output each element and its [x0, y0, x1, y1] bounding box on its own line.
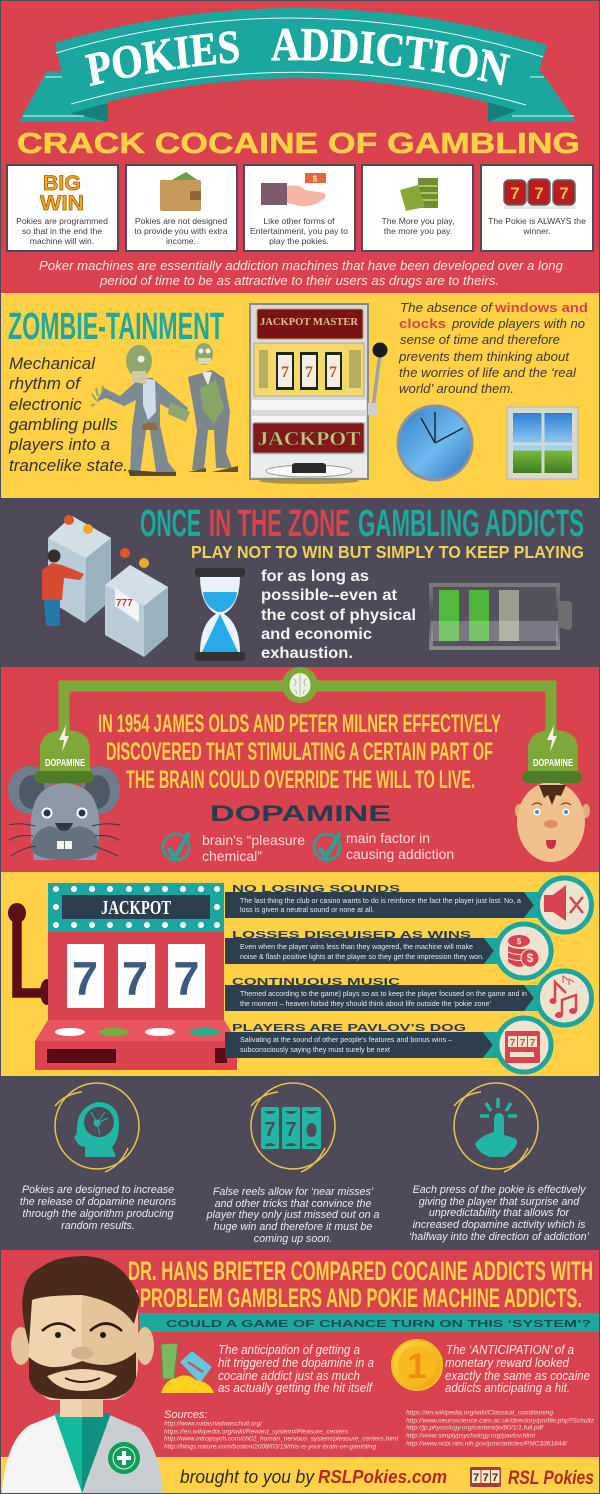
check 1	[163, 832, 305, 864]
text: exhaustion: for as long as	[261, 568, 369, 585]
card 5: 777 reels: The Pokie is ALWAYS the	[488, 216, 586, 226]
helmet left: DOPAMINE	[45, 757, 85, 769]
caption 2: and other tricks that convince the	[215, 1198, 371, 1210]
doctor coat	[2, 1413, 163, 1493]
lever	[17, 915, 48, 993]
doctor brows and eyes	[42, 1324, 122, 1338]
text: windows and clocks: windows and	[494, 300, 588, 315]
headline: olds and milner	[98, 710, 501, 794]
text: windows and clocks: provide players with no	[451, 316, 585, 331]
ring 2	[251, 1083, 335, 1172]
caption 2: player they only just missed out on a	[206, 1209, 379, 1221]
text: windows and clocks: clocks	[399, 316, 446, 331]
icon: slot machine: 7	[520, 1038, 526, 1049]
background: red header panel	[0, 0, 600, 293]
illustration: isometric machines	[42, 515, 168, 657]
caption 1: through the algorithm producing	[23, 1208, 174, 1220]
card 5: 777 reels: 7	[534, 184, 544, 203]
row 3: continuous music: CONTINUOUS MUSIC	[232, 976, 401, 988]
row 4: players are pavlov's dog: subconsciously saying they must surely be next	[240, 1047, 390, 1054]
card 3: hand and money: play the pokies.	[269, 236, 329, 246]
row 2: losses disguised as wins: Even when the player wins less than they wagered, the machine will make	[240, 944, 473, 951]
doctor beard	[29, 1352, 136, 1399]
row 1: no losing sounds: loss is given a neutral sound or none at all.	[240, 907, 374, 914]
caption 3: increased dopamine activity which is	[413, 1219, 586, 1231]
sources left: http://www.natashadowschull.org/	[164, 1420, 263, 1428]
card 1: big win: so that in the end the	[22, 226, 102, 236]
icon: brain	[282, 667, 318, 703]
card 2: wallet: income.	[166, 236, 196, 246]
text: windows and clocks: world’ around them.	[399, 381, 514, 396]
text: mechanical rhythm: rhythm of	[9, 374, 82, 393]
panel: dopamine mechanisms	[0, 1076, 600, 1250]
row 4: players are pavlov's dog: Salivating at the sound of other people’s features and bonus wins –	[240, 1037, 452, 1044]
caption 2: False reels allow for ‘near misses’	[213, 1186, 374, 1198]
row 3: continuous music	[225, 971, 592, 1025]
ribbon right tail	[488, 70, 576, 122]
card 5: 777 reels	[481, 165, 593, 251]
icon: slot machine	[250, 304, 388, 484]
headline: brieter	[128, 1256, 593, 1313]
icon: slot machine: 7	[530, 1038, 536, 1049]
icon: window	[507, 407, 578, 479]
ribbon left tail	[19, 71, 108, 122]
icon: right zombie	[188, 343, 238, 472]
reels	[254, 343, 364, 396]
row 1: no losing sounds: The last thing the club or casino wants to do is reinforce the fact the player just lost. No, a	[240, 898, 521, 905]
column 3	[409, 1083, 590, 1243]
caption 3: unpredictability that allows for	[429, 1207, 570, 1219]
footer credit	[180, 1466, 447, 1487]
doctor ears	[11, 1327, 154, 1365]
sources left: Sources:	[164, 1409, 207, 1421]
check 2	[314, 830, 454, 862]
icon: reels: 7	[264, 1119, 276, 1141]
caption 3: Each press of the pokie is effectively	[413, 1184, 586, 1196]
sources right: http://www.ncbi.nlm.nih.gov/pmc/articles/PMC3361844/	[406, 1440, 568, 1448]
subheading bar	[140, 1313, 600, 1332]
text: windows and clocks: the worries of life and the ‘real	[399, 365, 577, 380]
doctor scrubs	[54, 1395, 111, 1493]
sources right: http://www.simplypsychology.org/pavlov.html	[406, 1432, 536, 1440]
caption 1: Pokies are designed to increase	[22, 1184, 174, 1196]
text: anticipation left: hit triggered the dopamine in a	[218, 1356, 374, 1370]
reels: 7	[329, 364, 337, 381]
icon: clock	[398, 406, 472, 480]
check 2: causing addiction	[346, 846, 454, 862]
caption 2: coming up soon.	[254, 1233, 332, 1245]
text: mechanical rhythm: players into a	[8, 435, 110, 454]
icon: slot machine	[497, 1018, 551, 1072]
lever	[368, 342, 388, 415]
footer credit: RSLPokies.com	[318, 1466, 447, 1487]
heading: once in the zone gambling addicts: IN THE ZONE	[209, 503, 350, 545]
card 2: wallet: Pokies are not designed	[135, 216, 227, 226]
icon: coins: $	[517, 937, 522, 946]
card 1: big win	[7, 165, 118, 251]
panel: once in the zone	[0, 498, 600, 667]
helmet right	[522, 725, 582, 783]
text: anticipation left: cocaine addict just as much	[218, 1369, 360, 1383]
icon: coin	[392, 1340, 442, 1390]
ribbon main band	[55, 8, 547, 113]
row 2: losses disguised as wins	[225, 924, 551, 978]
title ribbon	[19, 8, 576, 122]
icon: coins	[497, 924, 551, 978]
text: mechanical rhythm: trancelike state.	[9, 456, 128, 475]
icon: razor and cocaine	[161, 1343, 214, 1393]
wire	[64, 686, 551, 735]
text: windows and clocks	[398, 300, 588, 396]
illustration: jackpot machine: 7	[72, 952, 98, 1005]
row 1: no losing sounds	[225, 878, 592, 932]
caption 3: ‘halfway into the direction of addiction’	[409, 1231, 590, 1243]
row 1: no losing sounds: NO LOSING SOUNDS	[232, 883, 400, 895]
heading: once in the zone gambling addicts: ONCE	[140, 503, 201, 545]
card 1: big win: WIN	[40, 192, 84, 215]
text: anticipation right: The ‘ANTICIPATION’ of a	[446, 1343, 574, 1357]
card 1: big win: Pokies are programmed	[16, 216, 108, 226]
icon: pressing finger	[475, 1098, 517, 1157]
icon: coins: $	[527, 951, 534, 965]
logo: rsl pokies: 7	[492, 1472, 498, 1484]
text: exhaustion: and economic	[261, 626, 372, 643]
jackpot master top panel: JACKPOT MASTER	[260, 316, 359, 328]
sources left: http://blogs.nature.com/boston/2008/03/19/this-is-your-brain-on-gambling	[164, 1444, 376, 1450]
helmet right: DOPAMINE	[533, 757, 573, 769]
sources right: http://www.neuroscience.cam.ac.uk/directory/profile.php?Schultz	[406, 1418, 595, 1424]
icon: reels	[261, 1107, 321, 1149]
sources left	[164, 1409, 399, 1450]
icon: left zombie	[91, 345, 190, 476]
logo: rsl pokies	[470, 1467, 594, 1489]
doctor face	[29, 1290, 138, 1400]
text: exhaustion: exhaustion.	[261, 645, 353, 662]
icon: coin: 1	[407, 1347, 427, 1386]
card 5: 777 reels: 7	[510, 184, 520, 203]
card 3: hand and money: $	[313, 174, 318, 184]
text: windows and clocks: The absence of	[400, 300, 493, 315]
intro text: Poker machines are essentially addiction machines that have been developed over a long	[39, 259, 563, 273]
card 3: hand and money: Like other forms of	[263, 216, 335, 226]
text: mechanical rhythm: gambling pulls	[9, 415, 118, 434]
text: windows and clocks: sense of time and therefore	[400, 332, 560, 347]
text: windows and clocks: prevents them thinking about	[398, 349, 570, 364]
card 2: wallet	[126, 165, 237, 251]
illustration: jackpot machine	[8, 883, 237, 1070]
text: mechanical rhythm: electronic	[9, 395, 82, 414]
intro text: period of time to be as attractive to their users as drugs are to theirs.	[99, 274, 499, 288]
row 3: continuous music: Themed according to the game) plays so as to keep the player focused on the game and in	[240, 991, 527, 998]
card 5: 777 reels: winner.	[522, 226, 551, 236]
heading: once in the zone gambling addicts	[140, 503, 584, 545]
panel: machine tricks	[0, 872, 600, 1076]
row 4: players are pavlov's dog	[225, 1018, 551, 1072]
illustration: jackpot machine: JACKPOT	[101, 897, 171, 919]
sources left: https://en.wikipedia.org/wiki/Reward_system#Pleasure_centers	[164, 1428, 349, 1436]
caption 1: random results.	[61, 1220, 135, 1232]
logo: rsl pokies: 7	[473, 1472, 479, 1484]
card 4: money stacks: The More you play,	[382, 216, 454, 226]
icon: head and neuron	[74, 1102, 119, 1157]
column 2	[206, 1083, 379, 1245]
text: anticipation left: The anticipation of getting a	[218, 1343, 360, 1357]
panel: dopamine	[0, 667, 600, 872]
person	[42, 550, 84, 626]
jackpot panel: JACKPOT	[258, 428, 361, 450]
subheading bar: COULD A GAME OF CHANCE TURN ON THIS ‘SYSTEM’?	[166, 1319, 591, 1330]
row 2: losses disguised as wins: noise & flash positive lights at the player so they get the impression they won.	[240, 954, 484, 961]
doctor badge	[108, 1442, 140, 1474]
icon: hourglass	[195, 568, 245, 661]
subtitle: CRACK COCAINE OF GAMBLING	[17, 128, 580, 160]
footer band	[0, 1457, 600, 1493]
row 2: losses disguised as wins: LOSSES DISGUISED AS WINS	[232, 929, 471, 941]
heading: zombie-tainment: ZOMBIE-TAINMENT	[8, 306, 224, 348]
card 3: hand and money	[244, 165, 355, 251]
text: anticipation right: exactly the same as cocaine	[445, 1369, 590, 1383]
jackpot master top panel	[257, 309, 363, 339]
icon: boy	[515, 782, 590, 862]
panel: dr brieter	[0, 1250, 600, 1494]
illustration: isometric machines: 777	[116, 598, 133, 609]
text: exhaustion: the cost of physical	[261, 607, 416, 624]
column 1	[20, 1083, 177, 1232]
row 3: continuous music: the moment – heaven forbid they should think about life outside the ‘pokie zone’	[240, 1001, 491, 1008]
sources right: https://en.wikipedia.org/wiki/Classical_conditioning	[406, 1410, 553, 1416]
caption 1: the release of dopamine neurons	[20, 1196, 177, 1208]
caption 3: giving the player that surprise and	[419, 1196, 580, 1208]
illustration: jackpot machine: 7	[122, 952, 148, 1005]
heading: dopamine: DOPAMINE	[210, 801, 391, 826]
icon: music notes	[538, 971, 592, 1025]
reels: 7	[305, 364, 313, 381]
card 1: big win: BIG	[43, 172, 81, 195]
panel: zombie-tainment	[0, 293, 600, 498]
text: anticipation left: as actually getting the hit itself	[218, 1381, 373, 1395]
card 5: 777 reels: 7	[559, 184, 569, 203]
ring 3	[454, 1083, 538, 1172]
check 2: main factor in	[346, 830, 430, 846]
sources left: http://www.intropsych.com/ch02_human_nervous_system/pleasure_centers.html	[164, 1436, 399, 1442]
icon: reels: 7	[285, 1119, 297, 1141]
caption 2: huge win and therefore it must be	[214, 1221, 372, 1233]
icon: muted speaker	[538, 878, 592, 932]
helmet left	[34, 725, 94, 783]
text: exhaustion: possible--even at	[261, 587, 397, 604]
text: anticipation right: monetary reward looked	[445, 1356, 570, 1370]
doctor hair	[22, 1256, 140, 1345]
card 2: wallet: to provide you with extra	[134, 226, 228, 236]
illustration: jackpot machine: 7	[173, 952, 200, 1005]
logo: rsl pokies: 7	[483, 1472, 489, 1484]
check 1: chemical”	[202, 848, 262, 864]
reels: 7	[281, 364, 289, 381]
title text: POKIES ADDICTION	[84, 28, 510, 86]
text: mechanical rhythm: Mechanical	[9, 354, 96, 373]
jackpot panel	[253, 423, 364, 453]
icon: slot machine: 7	[510, 1038, 516, 1049]
card 1: big win: machine will win.	[30, 236, 94, 246]
doctor nose	[71, 1346, 93, 1360]
text: anticipation right: addicts anticipating a hit.	[445, 1381, 570, 1395]
illustration: doctor	[2, 1256, 163, 1493]
icon: battery	[431, 585, 572, 648]
card 4: money stacks: the more you pay.	[384, 226, 452, 236]
ring 1	[55, 1083, 139, 1172]
footer credit: brought to you by	[180, 1466, 316, 1487]
check 1: brain's “pleasure	[202, 832, 305, 848]
sources right: http://jp.physiology.org/content/jn/80/1/1.full.pdf	[406, 1424, 544, 1432]
icon: mouse	[8, 766, 120, 860]
card 4: money stacks	[362, 165, 473, 251]
row 4: players are pavlov's dog: PLAYERS ARE PAVLOV’S DOG	[232, 1022, 466, 1034]
card row	[7, 165, 593, 251]
card 3: hand and money: Entertainment, you pay to	[250, 226, 348, 236]
